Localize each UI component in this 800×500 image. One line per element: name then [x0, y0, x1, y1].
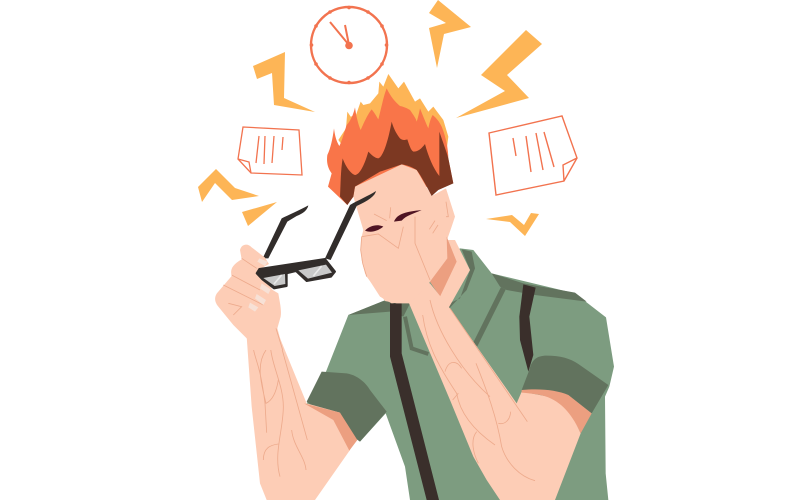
- face lines: [374, 202, 448, 233]
- right suspender strap: [519, 284, 536, 372]
- brown hair: [340, 122, 453, 205]
- figure: front forearm and fist: [361, 217, 592, 500]
- finger lines: [223, 258, 283, 350]
- fingernails: [248, 258, 271, 312]
- figure: head: [327, 74, 455, 303]
- neck: [415, 240, 470, 308]
- shirt shoulder shading: [348, 249, 587, 354]
- lenses: [263, 274, 285, 286]
- glasses frame: [257, 259, 335, 288]
- icon: right paper: [489, 116, 577, 195]
- neck shadow band: [430, 237, 457, 297]
- left upper arm: [247, 330, 350, 500]
- fist: [361, 227, 427, 303]
- icon: left paper: [238, 127, 302, 175]
- left sleeve: [307, 372, 387, 442]
- icon: clock: [310, 6, 388, 84]
- figure: raised hand and glasses: [215, 191, 376, 350]
- shirt body: [307, 248, 614, 500]
- left arm veins: [253, 330, 307, 477]
- glasses temple arms: [263, 191, 376, 260]
- hand: [215, 245, 283, 350]
- icon: lightning bolts: [198, 0, 542, 236]
- face: [353, 164, 455, 303]
- back flame: [338, 74, 448, 150]
- left suspender strap: [390, 303, 439, 500]
- fist lines: [361, 217, 430, 280]
- front flame: [327, 88, 453, 205]
- eyes: [365, 210, 422, 232]
- forearm: [408, 280, 581, 500]
- forearm veins: [423, 300, 535, 481]
- right sleeve: [522, 356, 608, 413]
- figure: shirt and left arm: [247, 240, 614, 500]
